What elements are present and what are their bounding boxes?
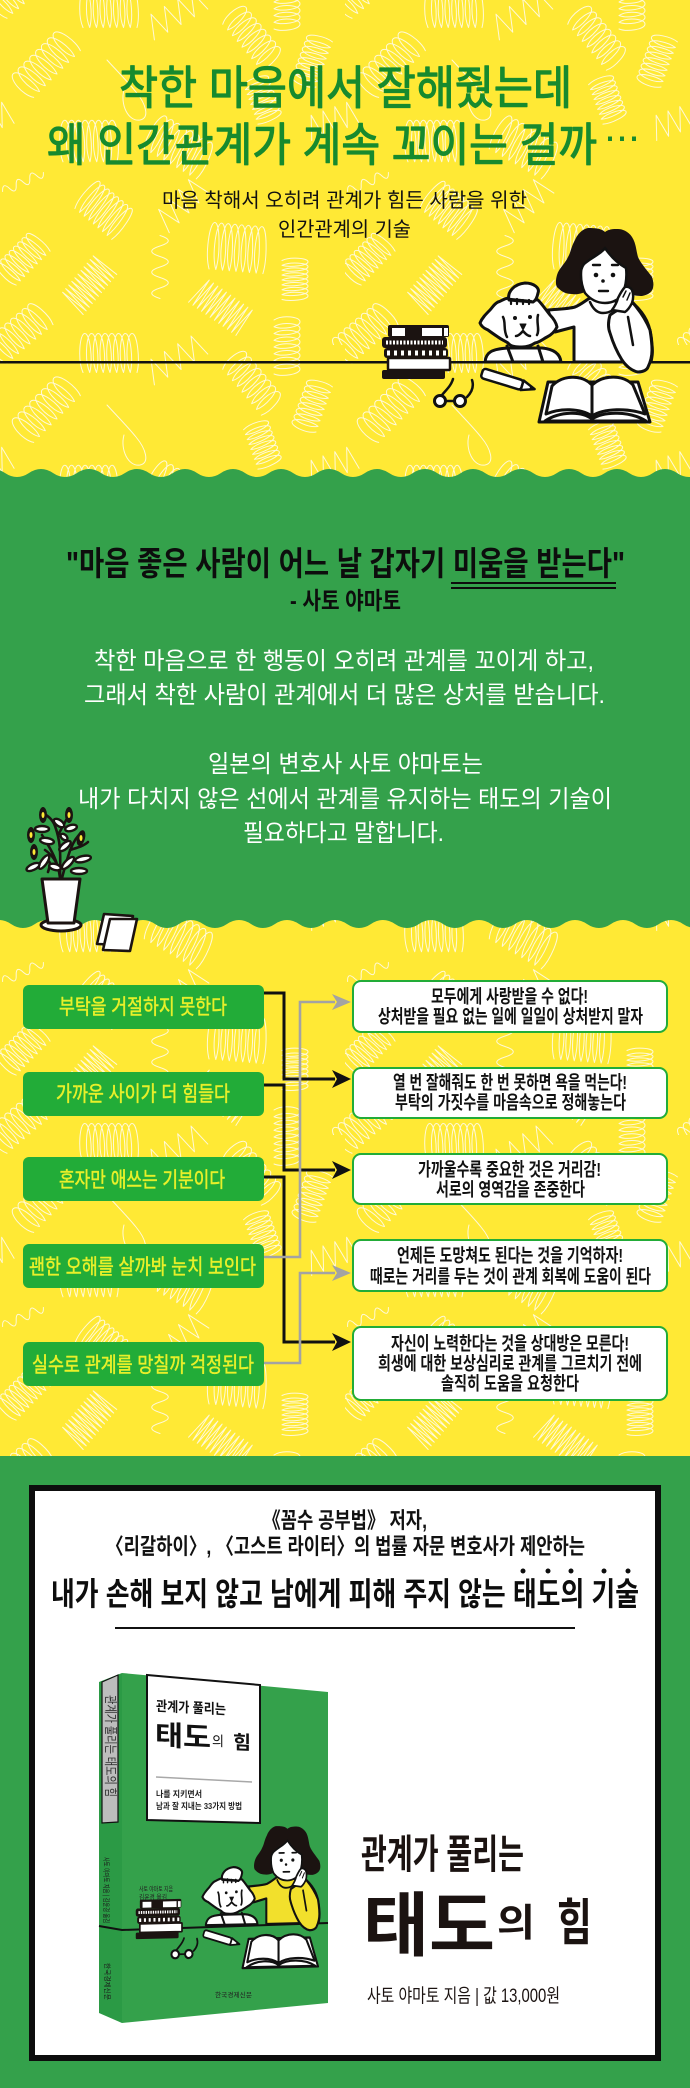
advice box 1: 모두에게 사랑받을 수 없다! xyxy=(431,986,588,1007)
problem box 3 xyxy=(23,1157,264,1201)
card intro lines xyxy=(106,1508,585,1559)
problem box 4: 괜한 오해를 살까봐 눈치 보인다 xyxy=(29,1256,256,1279)
book cover mockup: 관계가 풀리는 태도의 힘 xyxy=(103,1695,118,1797)
framed card xyxy=(32,1488,658,2058)
card intro lines: 〈리갈하이〉, 〈고스트 라이터〉의 법률 자문 변호사가 제안하는 xyxy=(106,1534,585,1559)
book cover mockup: 사토 야마토 지음 xyxy=(139,1884,173,1893)
subtitle xyxy=(162,189,527,241)
problem box 5: 실수로 관계를 망칠까 걱정된다 xyxy=(32,1354,254,1377)
book title lockup: 관계가 풀리는 xyxy=(361,1833,524,1877)
divider line xyxy=(115,1627,575,1629)
advice box 5 xyxy=(353,1327,667,1400)
body text xyxy=(78,648,612,847)
title: ··· xyxy=(603,112,641,159)
table line xyxy=(0,361,690,364)
advice box 3: 가까울수록 중요한 것은 거리감! xyxy=(418,1159,601,1180)
title xyxy=(47,62,641,171)
problem box 2: 가까운 사이가 더 힘들다 xyxy=(56,1083,230,1106)
book cover mockup: 힘 xyxy=(233,1732,251,1755)
heading underline xyxy=(451,583,616,588)
subtitle: 인간관계의 기술 xyxy=(278,218,411,241)
body text: 내가 다치지 않은 선에서 관계를 유지하는 태도의 기술이 xyxy=(78,786,612,813)
icon: paper sheets xyxy=(97,914,137,951)
advice box 4: 언제든 도망쳐도 된다는 것을 기억하자! xyxy=(397,1245,623,1266)
problem box 2 xyxy=(23,1072,264,1116)
book cover mockup: 나를 지키면서 xyxy=(156,1789,202,1799)
panel: green quote section xyxy=(0,469,690,940)
panel: top yellow intro xyxy=(0,0,690,480)
book cover mockup: 한국경제신문 xyxy=(215,1990,252,1999)
connectors: black arrows xyxy=(264,993,351,1351)
problem box 5 xyxy=(23,1342,264,1386)
book cover mockup: 한국경제신문 xyxy=(103,1963,112,2001)
book cover mockup: 태도 xyxy=(155,1720,211,1754)
book title lockup: 힘 xyxy=(557,1895,592,1951)
book cover mockup: 남과 잘 지내는 33가지 방법 xyxy=(156,1801,242,1811)
book title lockup xyxy=(361,1833,592,1965)
book cover mockup: 김윤경 옮김 xyxy=(139,1892,167,1901)
connectors: grey arrows xyxy=(264,994,351,1363)
advice box 1 xyxy=(353,981,667,1032)
book cover mockup: 사토 야마토 지음 | 김윤경 옮김 xyxy=(102,1857,111,1923)
body text: 착한 마음으로 한 행동이 오히려 관계를 꼬이게 하고, xyxy=(94,648,594,675)
panel: green book section xyxy=(0,1456,690,2088)
body text: 일본의 변호사 사토 야마토는 xyxy=(208,751,483,778)
book cover mockup xyxy=(99,1673,328,2023)
book cover mockup: 의 xyxy=(212,1733,224,1749)
emphasis dots xyxy=(520,1568,630,1574)
advice box 3: 서로의 영역감을 존중한다 xyxy=(436,1179,585,1200)
card intro lines: 《꼼수 공부법》 저자, xyxy=(263,1508,427,1533)
problem box 1 xyxy=(23,985,264,1029)
title: 착한 마음에서 잘해줬는데 xyxy=(119,62,572,114)
panel: yellow mapping section xyxy=(0,807,690,1456)
book cover mockup: 관계가 풀리는 xyxy=(156,1698,226,1717)
book title lockup: 태도 xyxy=(363,1887,495,1965)
problem box 4 xyxy=(23,1244,264,1288)
illustration: woman, dog, books, glasses, pencil and open book xyxy=(382,228,653,422)
problem box 3: 혼자만 애쓰는 기분이다 xyxy=(59,1169,225,1192)
advice box 4 xyxy=(353,1240,667,1291)
advice box 2 xyxy=(353,1068,667,1118)
advice box 5: 솔직히 도움을 요청한다 xyxy=(441,1373,579,1394)
subtitle: 마음 착해서 오히려 관계가 힘든 사람을 위한 xyxy=(162,189,527,212)
author and price: 사토 야마토 지음 | 값 13,000원 xyxy=(367,1985,560,2007)
title: 왜 인간관계가 계속 꼬이는 걸까 xyxy=(47,119,597,171)
book title lockup: 의 xyxy=(497,1903,535,1945)
body text: 그래서 착한 사람이 관계에서 더 많은 상처를 받습니다. xyxy=(84,682,605,709)
advice box 3 xyxy=(353,1154,667,1204)
body text: 필요하다고 말합니다. xyxy=(243,820,444,847)
quote author: - 사토 야마토 xyxy=(290,588,401,615)
icon: potted plant xyxy=(25,807,91,931)
problem box 1: 부탁을 거절하지 못한다 xyxy=(59,996,227,1019)
